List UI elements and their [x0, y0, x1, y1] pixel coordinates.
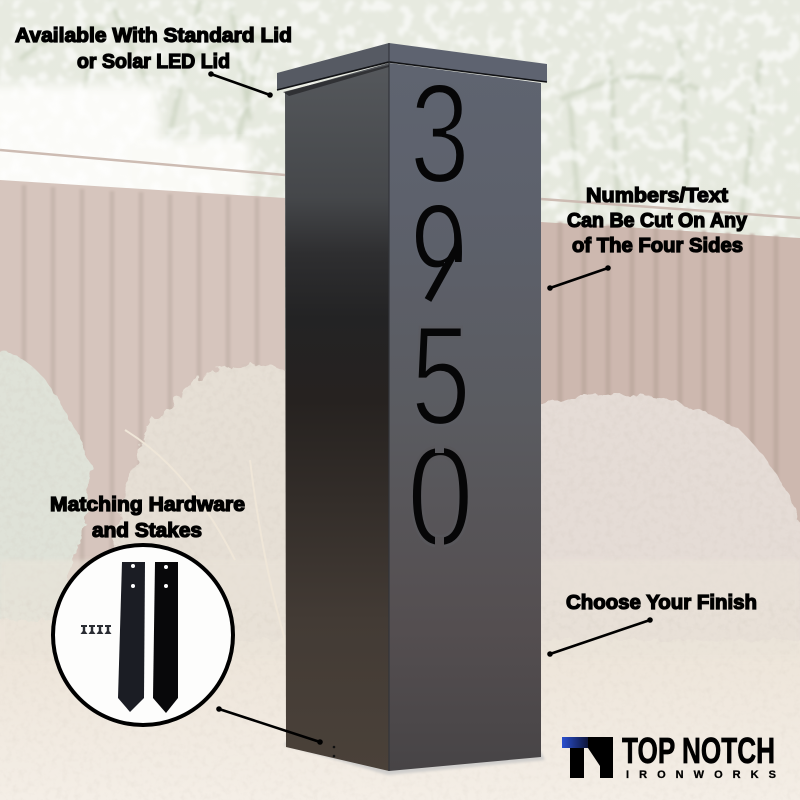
- callout: finish: [547, 592, 757, 657]
- callout: lid options: or Solar LED Lid: [77, 51, 230, 73]
- icon: stake right: [153, 562, 178, 713]
- callout: finish: Choose Your Finish: [566, 592, 757, 614]
- callout: numbers and text: of The Four Sides: [572, 235, 743, 257]
- inset circle: stakes and hardware: [53, 545, 233, 725]
- callout: hardware and stakes: Matching Hardware: [50, 494, 245, 516]
- callout: numbers and text: Can Be Cut On Any: [567, 210, 748, 232]
- callout: numbers and text: [547, 185, 748, 291]
- cut-out house number 3950: 9: [410, 176, 468, 333]
- callout: hardware and stakes: and Stakes: [92, 520, 202, 542]
- callout: lid options: [15, 25, 292, 98]
- cut-out house number 3950: [407, 55, 474, 575]
- bushes: [0, 349, 800, 640]
- icon: screws: [80, 625, 112, 634]
- logo: Top Notch Ironworks: IRONWORKS: [626, 769, 776, 781]
- product: metal address post: [277, 43, 547, 775]
- fence left: [0, 180, 285, 620]
- screw holes: [333, 746, 335, 757]
- base shadow: [284, 742, 545, 775]
- fence right: [541, 222, 800, 620]
- callout: numbers and text: Numbers/Text: [586, 185, 728, 207]
- cut-out house number 3950: 0: [407, 418, 474, 575]
- cut-out house number 3950: 5: [411, 297, 471, 454]
- logo mark: [562, 737, 613, 778]
- callout: lid options: Available With Standard Lid: [15, 25, 292, 47]
- leader: stakes: [216, 706, 323, 745]
- left face: [285, 63, 389, 771]
- callout: hardware and stakes: [50, 494, 245, 542]
- ground: [0, 600, 800, 800]
- right face: [389, 63, 541, 771]
- cut-out house number 3950: 3: [410, 55, 470, 212]
- logo: Top Notch Ironworks: [562, 730, 776, 781]
- lid: [277, 43, 547, 96]
- icon: stake left: [118, 562, 145, 712]
